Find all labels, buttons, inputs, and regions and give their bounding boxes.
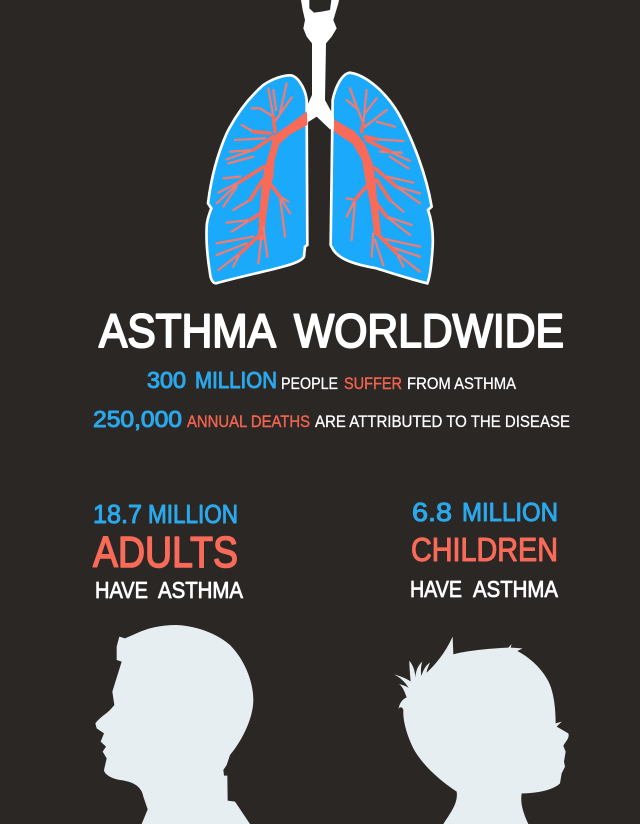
stat line: 250,000 annual deaths: ANNUAL DEATHS <box>187 412 310 431</box>
icon: adult head silhouette <box>95 625 253 824</box>
icon: lungs and trachea <box>206 0 433 283</box>
stat line: 250,000 annual deaths <box>93 406 570 432</box>
stat line: 300 million people: PEOPLE <box>281 374 338 393</box>
icon: child head silhouette <box>394 637 569 824</box>
adults statistic <box>93 499 244 603</box>
children statistic <box>410 497 559 602</box>
stat line: 300 million people: SUFFER <box>344 374 402 393</box>
right lung <box>331 73 433 283</box>
stat line: 300 million people <box>147 367 517 393</box>
title <box>99 304 564 357</box>
adults statistic: ASTHMA <box>158 577 244 603</box>
stat line: 250,000 annual deaths: ARE ATTRIBUTED TO THE DISEASE <box>315 412 570 431</box>
trachea <box>301 0 339 129</box>
stat line: 300 million people: FROM ASTHMA <box>407 374 517 393</box>
stat line: 300 million people: 300 <box>147 367 186 393</box>
title: WORLDWIDE <box>294 304 564 357</box>
children statistic: 6.8 <box>412 497 452 527</box>
adults statistic: MILLION <box>148 499 238 529</box>
children statistic: CHILDREN <box>411 531 558 568</box>
title: ASTHMA <box>99 304 277 357</box>
left lung <box>206 75 307 283</box>
adults statistic: ADULTS <box>93 528 238 577</box>
children statistic: MILLION <box>462 497 558 527</box>
stat line: 300 million people: MILLION <box>195 367 277 393</box>
adults statistic: 18.7 <box>93 499 142 529</box>
children statistic: ASTHMA <box>473 576 559 602</box>
adults statistic: HAVE <box>95 577 148 603</box>
stat line: 250,000 annual deaths: 250,000 <box>93 406 182 432</box>
children statistic: HAVE <box>410 576 462 602</box>
